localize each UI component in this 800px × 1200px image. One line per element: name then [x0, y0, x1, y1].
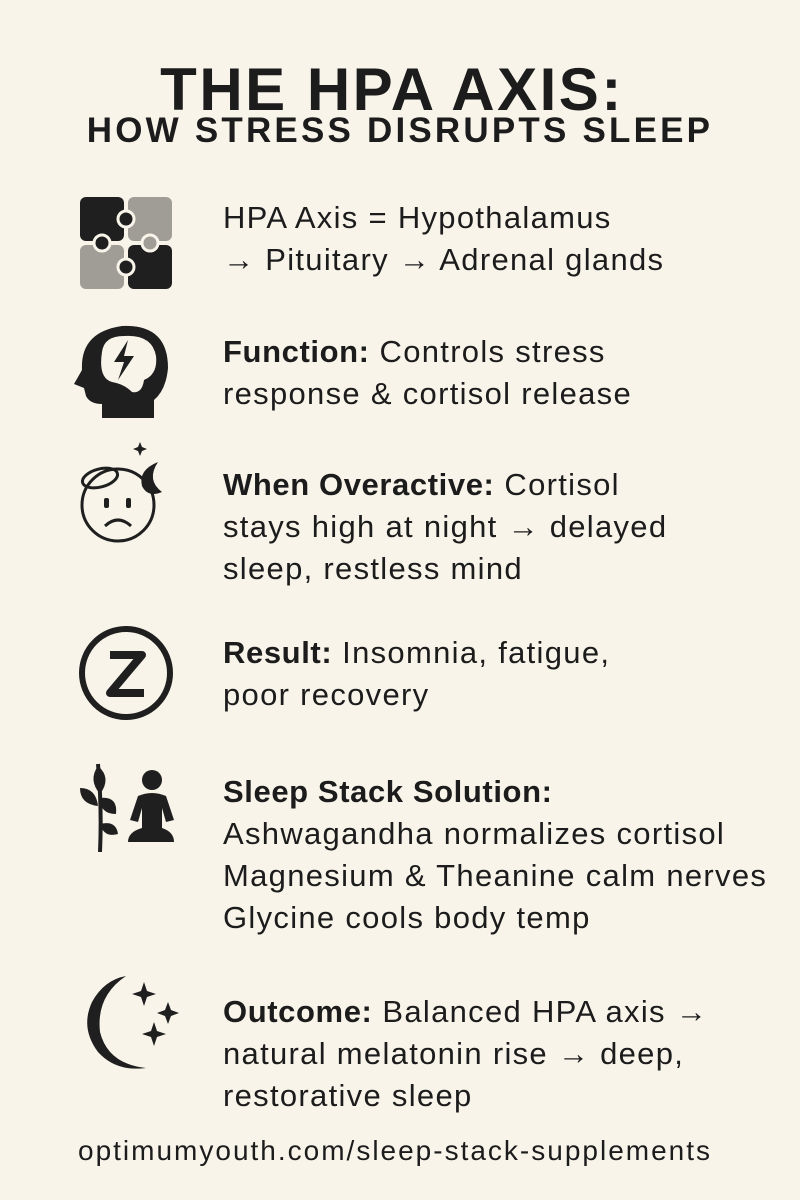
text: when overactive: When Overactive: Cortisol — [223, 467, 620, 502]
text: outcome — [223, 994, 708, 1113]
text: sleep stack solution — [223, 774, 767, 935]
footer url: optimumyouth.com/sleep-stack-supplements — [78, 1135, 712, 1166]
icon: plant and meditation — [80, 764, 174, 852]
icon: head with brain — [74, 326, 168, 418]
text: when overactive — [223, 467, 667, 586]
text: function: Function: Controls stress — [223, 334, 606, 369]
text: outcome: Outcome: Balanced HPA axis → — [223, 994, 708, 1029]
text: sleep stack solution: Ashwagandha normalizes cortisol — [223, 816, 725, 851]
text: when overactive: sleep, restless mind — [223, 551, 523, 586]
text: result: poor recovery — [223, 677, 429, 712]
title: THE HPA AXIS: — [160, 56, 624, 123]
text: sleep stack solution: Glycine cools body temp — [223, 900, 591, 935]
text: sleep stack solution: Sleep Stack Solution: — [223, 774, 553, 809]
text: outcome: natural melatonin rise → deep, — [223, 1036, 684, 1071]
text: HPA axis: → Pituitary → Adrenal glands — [223, 242, 664, 277]
icon: puzzle — [80, 197, 172, 289]
text: function — [223, 334, 632, 411]
icon: Z circle — [79, 626, 173, 720]
icon: worried face with moon — [80, 442, 162, 542]
icon: moon and stars — [87, 976, 179, 1069]
text: result — [223, 635, 610, 712]
text: when overactive: stays high at night → delayed — [223, 509, 667, 544]
text: HPA axis — [223, 200, 664, 277]
text: function: response & cortisol release — [223, 376, 632, 411]
text: outcome: restorative sleep — [223, 1078, 473, 1113]
text: sleep stack solution: Magnesium & Theanine calm nerves — [223, 858, 767, 893]
subtitle: HOW STRESS DISRUPTS SLEEP — [87, 111, 713, 150]
text: result: Result: Insomnia, fatigue, — [223, 635, 610, 670]
text: HPA axis: HPA Axis = Hypothalamus — [223, 200, 612, 235]
